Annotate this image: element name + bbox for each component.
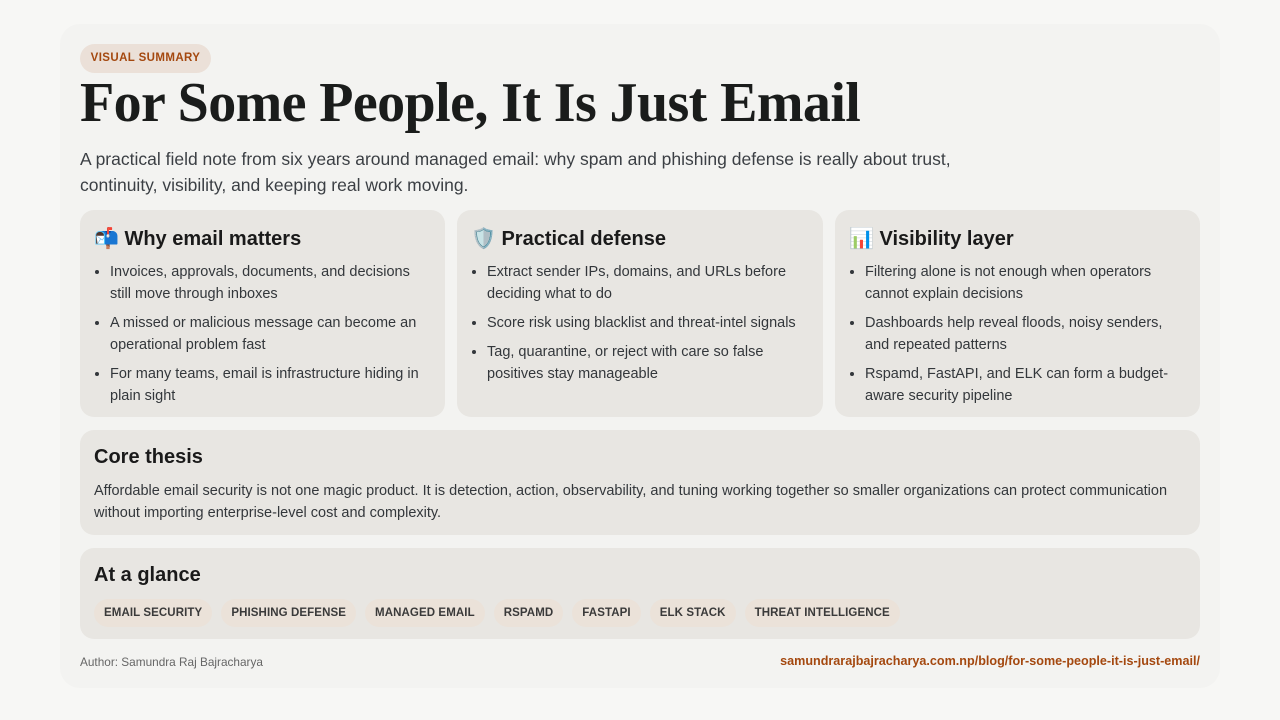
panel: visibility layer: Filtering alone is not enough when operators cannot explain decisions [865,264,1151,302]
tags: MANAGED EMAIL [375,607,475,619]
tags: RSPAMD [504,607,553,619]
tags: ELK STACK [660,607,726,619]
tags: FASTAPI [582,607,631,619]
panel: practical defense: Score risk using blacklist and threat-intel signals [487,315,796,331]
author: Author: Samundra Raj Bajracharya [80,655,263,669]
panel: at a glance [80,548,1200,639]
panel: visibility layer: Rspamd, FastAPI, and ELK can form a budget-aware security pipeline [865,366,1168,404]
panel: visibility layer: Dashboards help reveal floods, noisy senders, and repeated patterns [865,315,1162,353]
panel: core thesis [80,430,1200,535]
panel: why email matters: 📬 Why email matters [94,228,301,250]
tags: PHISHING DEFENSE [231,607,346,619]
panel: practical defense: Extract sender IPs, domains, and URLs before deciding what to do [487,264,786,302]
subtitle: A practical field note from six years around managed email: why spam and phishing defense is really about trust, continuity, visibility, and keeping real work moving. [80,149,951,195]
panel: why email matters: For many teams, email is infrastructure hiding in plain sight [110,366,419,404]
tags [94,599,900,627]
tags: THREAT INTELLIGENCE [755,607,890,619]
url: samundrarajbajracharya.com.np/blog/for-some-people-it-is-just-email/ [780,654,1200,668]
panel: visibility layer [835,210,1200,417]
panel: practical defense: 🛡️ Practical defense [471,228,666,250]
panel: practical defense: Tag, quarantine, or reject with care so false positives stay manageable [487,344,763,382]
panel: why email matters: A missed or malicious message can become an operational problem fast [110,315,416,353]
title: For Some People, It Is Just Email [80,72,860,134]
panel: at a glance: At a glance [94,564,201,586]
panel: why email matters [80,210,445,417]
panel: visibility layer: 📊 Visibility layer [849,228,1014,250]
badge [80,44,211,73]
panel: practical defense [457,210,823,417]
panel: core thesis: Affordable email security is not one magic product. It is detection, action, observability, and tuning working together so smaller organizations can protect communication without importing enterprise-level cost and complexity. [94,483,1167,521]
panel: why email matters: Invoices, approvals, documents, and decisions still move through inboxes [110,264,410,302]
panel: core thesis: Core thesis [94,446,203,468]
tags: EMAIL SECURITY [104,607,202,619]
badge: VISUAL SUMMARY [91,52,200,64]
